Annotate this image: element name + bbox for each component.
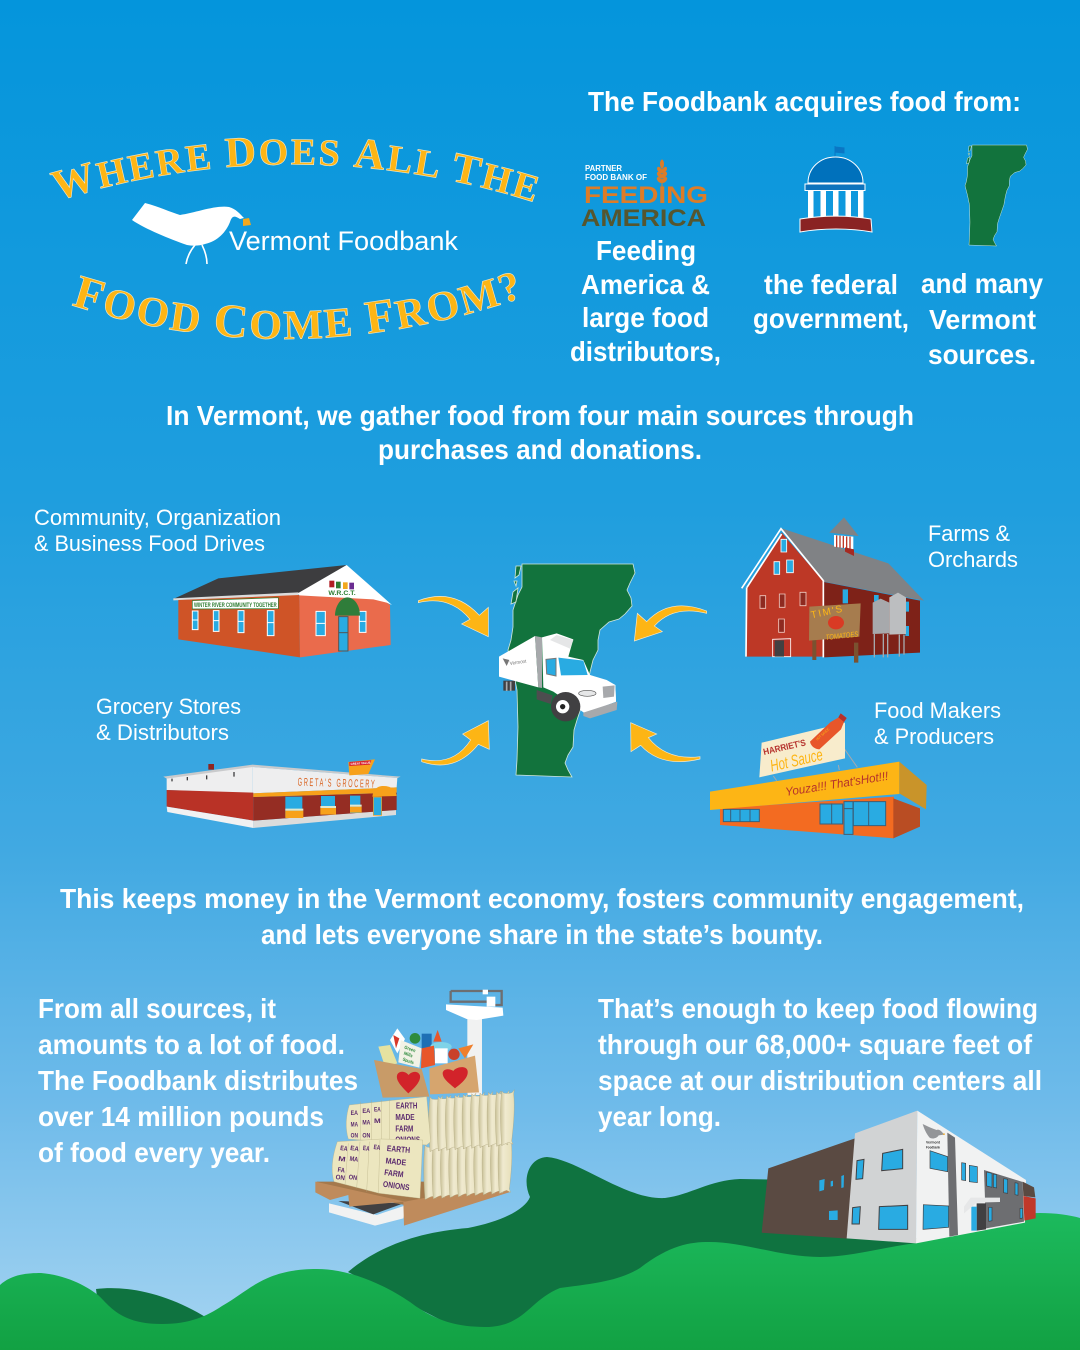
- front hills: [0, 1213, 1080, 1350]
- intro sentence: purchases and donations.: [378, 434, 702, 465]
- illustration: scale with pallet of food: EA: [374, 1107, 381, 1114]
- illustration: scale with pallet of food: ON: [335, 1174, 345, 1182]
- paragraph: 14 million pounds: The Foodbank distributes: [38, 1065, 358, 1096]
- source: federal government label: government,: [753, 303, 909, 334]
- paragraph: 68,000 square feet: That’s enough to keep food flowing: [598, 993, 1038, 1024]
- label: food drives: Community, Organization: [34, 505, 281, 530]
- economy sentence: This keeps money in the Vermont economy, fosters community engagement,: [60, 883, 1024, 914]
- illustration: scale with pallet of food: EA: [362, 1108, 370, 1115]
- illustration: big Vermont map: [508, 564, 635, 777]
- source: Vermont sources label: [921, 268, 1044, 370]
- illustration: distribution center building: Foodbank: [926, 1145, 941, 1149]
- label: grocery stores: [96, 694, 241, 745]
- label: farms and orchards: Orchards: [928, 547, 1018, 572]
- paragraph: 68,000 square feet: [598, 993, 1042, 1132]
- illustration: scale with pallet of food: FARM: [395, 1125, 414, 1134]
- food in box: Mills: [403, 1051, 414, 1059]
- illustration: hot sauce producer: Hot Sauce: [768, 745, 825, 776]
- illustration: Greta's grocery: GREAT VALUE: [350, 761, 371, 766]
- illustration: scale with pallet of food: MA: [351, 1121, 358, 1128]
- illustration: scale with pallet of food: FA: [337, 1167, 345, 1175]
- icon: small Vermont map: [965, 145, 1028, 246]
- Feeding America logo: FEEDING: [584, 182, 708, 209]
- title: where does all the food come from: [49, 138, 538, 340]
- illustration: hot sauce producer: HARRIET'S: [762, 737, 807, 757]
- source: federal government label: the federal: [764, 269, 898, 300]
- illustration: community building: W.R.C.T.: [328, 591, 356, 597]
- label: food makers: & Producers: [874, 724, 994, 749]
- illustration: scale with pallet of food: EA: [340, 1145, 348, 1153]
- illustration: barn: TIM'S: [810, 604, 844, 621]
- illustration: scale with pallet of food: EA: [350, 1145, 359, 1153]
- food in box: Green: [404, 1045, 416, 1053]
- economy sentence: and lets everyone share in the state’s bounty.: [261, 919, 823, 950]
- illustration: scale with pallet of food: [315, 990, 514, 1226]
- illustration: scale with pallet of food: EARTH: [386, 1143, 411, 1155]
- illustration: scale with pallet of food: EA: [373, 1144, 381, 1152]
- illustration: scale with pallet of food: EA: [362, 1145, 370, 1153]
- illustration: scale with pallet of food: MA: [349, 1156, 359, 1164]
- title: where does all the food come from: WHERE DOES ALL THE: [49, 138, 538, 202]
- illustration: scale with pallet of food: MADE: [395, 1113, 415, 1122]
- source: Vermont sources label: and many: [921, 268, 1044, 299]
- illustration: Greta's grocery: GRETA'S GROCERY: [298, 777, 377, 791]
- food in box: Spuds: [402, 1057, 415, 1065]
- paragraph: 14 million pounds: over 14 million pounds: [38, 1101, 324, 1132]
- illustration: scale with pallet of food: ON: [351, 1133, 358, 1140]
- source: Vermont sources label: sources.: [928, 339, 1036, 370]
- label: grocery stores: & Distributors: [96, 720, 229, 745]
- illustration: delivery truck: Vermont: [509, 659, 527, 667]
- illustration: hot sauce producer: [710, 713, 927, 838]
- intro sentence: In Vermont, we gather food from four main sources through: [166, 400, 914, 431]
- label: food makers: [874, 698, 1001, 749]
- source: Feeding America label: distributors,: [570, 336, 721, 367]
- label: farms and orchards: Farms &: [928, 521, 1010, 546]
- economy sentence: [60, 883, 1024, 950]
- Feeding America logo: AMERICA: [581, 205, 706, 232]
- illustration: scale with pallet of food: EA: [351, 1110, 358, 1117]
- arrow: food makers to Vermont: [631, 723, 700, 762]
- paragraph: 68,000 square feet: through our 68,000+ square feet of: [598, 1029, 1033, 1060]
- paragraph: 68,000 square feet: year long.: [598, 1101, 721, 1132]
- Feeding America logo: PARTNER: [585, 164, 622, 173]
- paragraph: 14 million pounds: amounts to a lot of food.: [38, 1029, 345, 1060]
- intro sentence: [166, 400, 914, 465]
- paragraph: 14 million pounds: From all sources, it: [38, 993, 276, 1024]
- illustration: scale with pallet of food: ONIONS: [395, 1135, 421, 1144]
- label: food makers: Food Makers: [874, 698, 1001, 723]
- paragraph: 68,000 square feet: space at our distribution centers all: [598, 1065, 1042, 1096]
- illustration: scale with pallet of food: MADE: [385, 1155, 407, 1168]
- illustration: scale with pallet of food: M: [374, 1118, 381, 1125]
- illustration: distribution center building: [762, 1111, 1036, 1243]
- source: federal government label: [753, 269, 909, 334]
- paragraph: 14 million pounds: of food every year.: [38, 1137, 270, 1168]
- illustration: barn: [742, 517, 924, 663]
- Vermont Foodbank logo: Vermont Foodbank: [229, 226, 458, 256]
- label: food drives: & Business Food Drives: [34, 531, 265, 556]
- source: Feeding America label: large food: [582, 302, 709, 333]
- illustration: scale with pallet of food: EARTH: [396, 1101, 418, 1110]
- arrow: grocery to Vermont: [422, 721, 489, 765]
- arrow: farms to Vermont: [634, 606, 707, 641]
- source: Feeding America label: [570, 235, 721, 367]
- illustration: hot sauce producer: HOT SAUCE: [815, 727, 831, 741]
- title: where does all the food come from: FOOD COME FROM?: [72, 273, 516, 340]
- illustration: Greta's grocery: [163, 759, 401, 828]
- Vermont Foodbank logo: [132, 203, 458, 264]
- illustration: scale with pallet of food: ONIONS: [382, 1179, 411, 1192]
- back hills: [96, 1157, 960, 1340]
- illustration: scale with pallet of food: ON: [348, 1174, 358, 1182]
- label: farms and orchards: [928, 521, 1018, 572]
- source: Feeding America label: Feeding: [596, 235, 696, 266]
- illustration: community building: WINTER RIVER COMMUNITY TOGETHER: [194, 602, 277, 609]
- illustration: delivery truck: [499, 633, 617, 721]
- icon: capitol dome: [800, 146, 872, 232]
- illustration: scale with pallet of food: FARM: [384, 1167, 404, 1179]
- illustration: barn: TOMATOES: [825, 630, 859, 642]
- source: Feeding America label: America &: [581, 269, 710, 300]
- food in box: [378, 1028, 473, 1068]
- arrow: food drives to Vermont: [418, 596, 488, 637]
- paragraph: 14 million pounds: [38, 993, 358, 1168]
- illustration: scale with pallet of food: MA: [362, 1119, 370, 1126]
- illustration: scale with pallet of food: M: [338, 1156, 347, 1164]
- illustration: community building: [173, 565, 392, 657]
- source: Vermont sources label: Vermont: [929, 304, 1036, 335]
- illustration: distribution center building: Vermont: [926, 1140, 941, 1144]
- heading: acquires food from: The Foodbank acquires food from:: [588, 86, 1021, 117]
- label: food drives: [34, 505, 281, 556]
- illustration: hot sauce producer: Youza!!! That'sHot!!!: [784, 769, 890, 799]
- Feeding America logo: FOOD BANK OF: [585, 173, 647, 182]
- Feeding America logo: [581, 160, 708, 232]
- label: grocery stores: Grocery Stores: [96, 694, 241, 719]
- illustration: scale with pallet of food: ON: [362, 1133, 370, 1140]
